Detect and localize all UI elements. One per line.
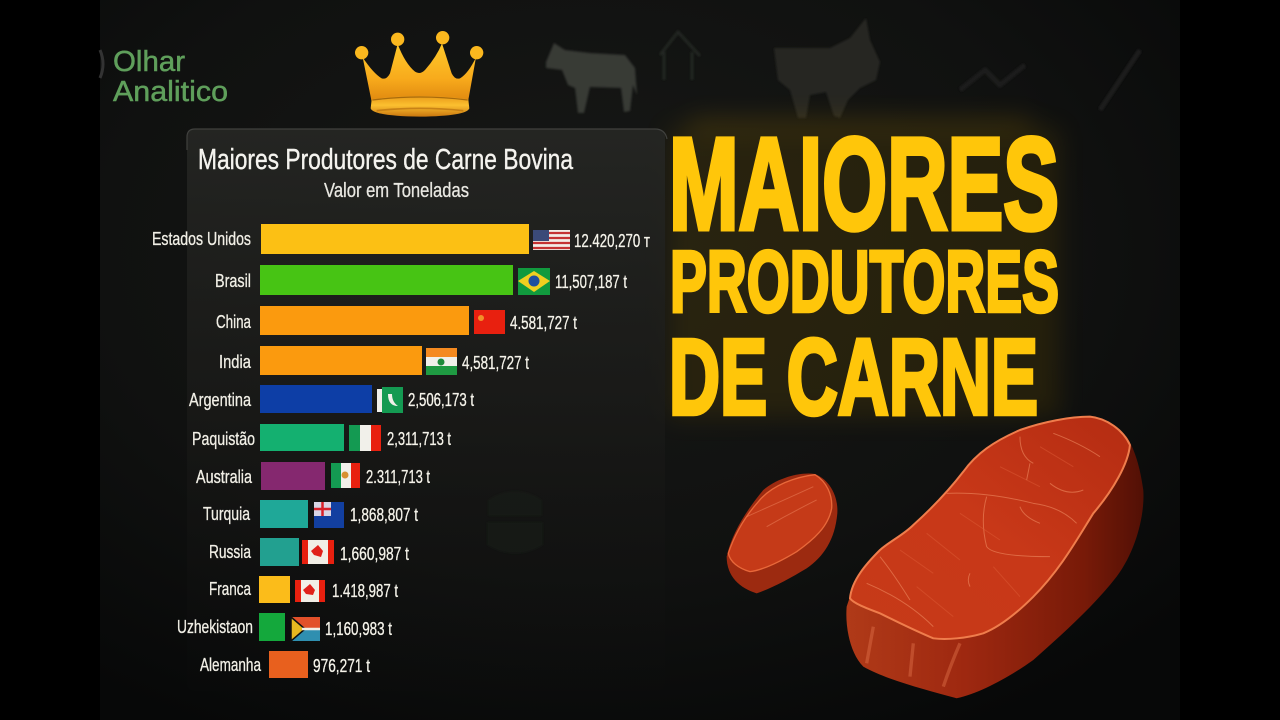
- row: Uzhekistaon: 1,160,983 t: [325, 619, 392, 639]
- row: Alemanha: [200, 651, 370, 678]
- illustration: small steak: [727, 474, 837, 593]
- title glow: [668, 118, 1060, 418]
- row: Alemanha: Alemanha: [200, 655, 262, 675]
- row: India: India: [219, 352, 252, 372]
- row: Argentina: 2,506,173 t: [408, 390, 474, 410]
- row: Uzhekistaon: Uzhekistaon: [177, 617, 253, 637]
- row: China: [216, 306, 577, 335]
- logo: Olhar Analitico: Olhar: [113, 46, 185, 78]
- row: China: 4.581,727 t: [510, 313, 577, 333]
- row: Brasil: [215, 265, 627, 295]
- panel: chart: [152, 129, 667, 691]
- row: Alemanha: 976,271 t: [313, 656, 370, 676]
- row: Russia: [209, 538, 409, 566]
- row: Argentina: Argentina: [189, 390, 252, 410]
- row: Franca: Franca: [209, 579, 252, 599]
- chart subheading: Valor em Toneladas: [324, 180, 469, 202]
- chart heading: Maiores Produtores de Carne Bovina: [198, 144, 574, 176]
- row: Uzhekistaon: [177, 613, 392, 641]
- background silhouette: bull: [774, 18, 880, 118]
- row: Brasil: 11,507,187 t: [555, 272, 627, 292]
- icon: crown: [355, 31, 483, 117]
- row: Argentina: [189, 385, 474, 413]
- row: Brasil: Brasil: [215, 271, 251, 291]
- row: Turquia: Turquia: [203, 504, 251, 524]
- row: Australia: Australia: [196, 467, 253, 487]
- background silhouette: house: [660, 32, 700, 80]
- row: Russia: Russia: [209, 542, 252, 562]
- row: Turquia: [203, 500, 418, 528]
- headline: [669, 110, 1059, 437]
- logo: Olhar Analitico: Analitico: [113, 76, 228, 108]
- background silhouette: trend arrow: [960, 50, 1140, 110]
- headline: MAIORES: [669, 110, 1059, 257]
- headline: DE CARNE: [669, 316, 1038, 437]
- background silhouette: cow: [546, 43, 637, 113]
- row: Franca: [209, 576, 398, 603]
- headline: PRODUTORES: [670, 234, 1059, 330]
- row: Estados Unidos: Estados Unidos: [152, 229, 251, 249]
- row: India: [219, 346, 529, 375]
- row: Estados Unidos: [152, 224, 650, 254]
- logo: Olhar Analitico: [100, 46, 228, 108]
- illustration: large steak: [846, 417, 1143, 698]
- row: India: 4,581,727 t: [462, 353, 529, 373]
- row: Australia: [196, 462, 430, 490]
- row: Estados Unidos: 12.420,270 т: [574, 231, 650, 251]
- row: Russia: 1,660,987 t: [340, 544, 409, 564]
- row: Paquistão: Paquistão: [192, 429, 255, 449]
- row: Paquistão: [192, 424, 451, 451]
- row: Australia: 2.311,713 t: [366, 467, 430, 487]
- row: Paquistão: 2,311,713 t: [387, 429, 451, 449]
- row: Turquia: 1,868,807 t: [350, 505, 418, 525]
- row: Franca: 1.418,987 t: [332, 581, 398, 601]
- row: China: China: [216, 312, 252, 332]
- background silhouette: padlock: [487, 491, 543, 554]
